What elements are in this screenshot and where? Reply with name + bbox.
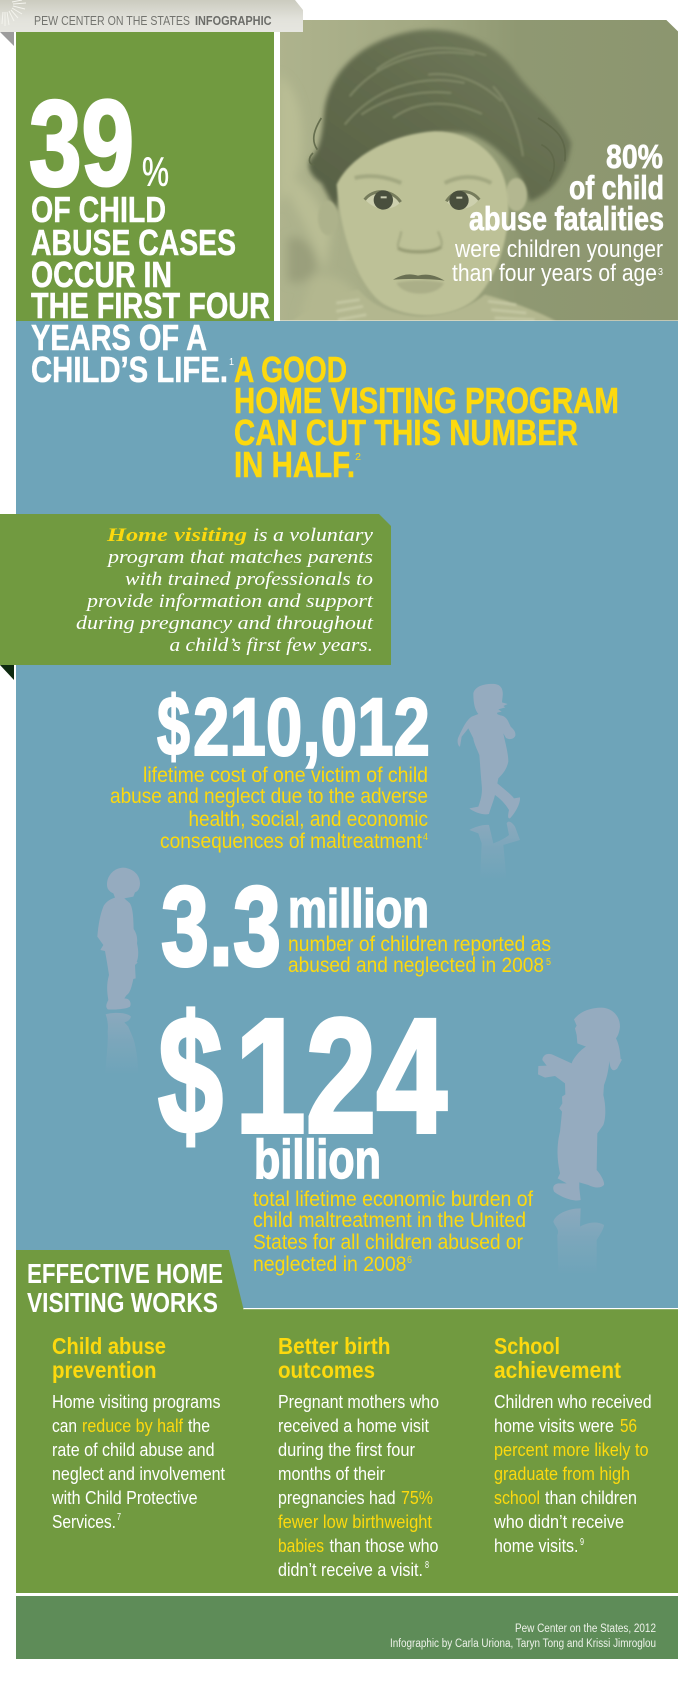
column: school achievement (493, 1333, 652, 1556)
column: better birth outcomes (278, 1333, 439, 1580)
column: child abuse prevention: reduce by half (82, 1415, 184, 1436)
column: school achievement: who didn’t receive (493, 1511, 624, 1532)
credit text (390, 1623, 656, 1650)
stat: 3.3 million children: 3.3 (161, 863, 281, 989)
panel: effective home visiting works (16, 1250, 678, 1593)
column: better birth outcomes: months of their (278, 1463, 385, 1484)
column: school achievement: Children who received (494, 1391, 652, 1412)
column: better birth outcomes: fewer low birthweight (278, 1511, 432, 1532)
headline: good home visiting program: A GOOD (234, 349, 347, 390)
column: better birth outcomes: 8 (425, 1560, 429, 1571)
stat description: neglected in 2008 (253, 1253, 406, 1276)
column: child abuse prevention: Child abuse (52, 1333, 166, 1359)
headline: good home visiting program: IN HALF. (234, 444, 355, 485)
column: school achievement: percent more likely to (494, 1439, 649, 1460)
callout on photo: 80 percent: 3 (658, 267, 663, 278)
column: better birth outcomes: pregnancies had (278, 1487, 396, 1508)
definition text: during pregnancy and throughout (76, 613, 374, 634)
column: child abuse prevention: 7 (117, 1512, 121, 1523)
stat description: 1 (229, 357, 234, 368)
ears (318, 178, 527, 235)
headline: good home visiting program: 2 (355, 452, 361, 463)
stat description: number of children reported as (288, 933, 551, 956)
stat: 124 billion dollars: 124 (235, 984, 447, 1167)
column: better birth outcomes: received a home visit (278, 1415, 429, 1436)
stat description (253, 1188, 533, 1276)
stat description: consequences of maltreatment (160, 830, 422, 853)
section heading (27, 1258, 223, 1318)
stat description: CHILD’S LIFE. (31, 349, 228, 390)
stat description (110, 764, 428, 853)
definition text: with trained professionals to (125, 569, 373, 590)
stat description: lifetime cost of one victim of child (143, 764, 428, 787)
column: child abuse prevention: neglect and involvement (52, 1463, 225, 1484)
shirt (329, 294, 555, 320)
panel: blue background (16, 321, 678, 1309)
column: school achievement: home visits. (494, 1535, 578, 1556)
column: school achievement: 9 (580, 1537, 584, 1548)
column: better birth outcomes: didn’t receive a visit. (278, 1559, 423, 1580)
section heading: VISITING WORKS (27, 1287, 218, 1318)
column: school achievement: achievement (494, 1357, 621, 1383)
stat description: 4 (423, 832, 428, 843)
stat: 210,012 dollars lifetime cost: 210,012 (193, 682, 430, 773)
header label: INFOGRAPHIC (195, 13, 272, 28)
stat description: YEARS OF A (31, 317, 207, 358)
stat description: abused and neglected in 2008 (288, 954, 544, 977)
panel: footer credits (16, 1596, 678, 1659)
stat description (288, 933, 551, 977)
sunburst logo (2, 0, 26, 26)
icon: girl silhouette (538, 1008, 622, 1275)
column: child abuse prevention: can (52, 1415, 77, 1436)
definition text (76, 525, 374, 656)
stat description: 6 (407, 1255, 412, 1266)
column: child abuse prevention: prevention (52, 1357, 156, 1383)
facial features (355, 176, 491, 294)
stat description: OCCUR IN (31, 254, 172, 295)
icon: definition ribbon fold (0, 665, 14, 680)
column: child abuse prevention: Services. (52, 1511, 116, 1532)
stat description: abuse and neglect due to the adverse (110, 785, 428, 808)
column: child abuse prevention (51, 1333, 225, 1532)
icon: top ribbon fold (0, 32, 14, 46)
stat description: ABUSE CASES (31, 222, 236, 263)
stat: 210,012 dollars lifetime cost: $ (157, 679, 190, 773)
stat: 124 billion dollars (158, 981, 533, 1276)
panel: home visiting definition (0, 514, 391, 665)
face (337, 131, 509, 315)
stat description: 5 (546, 957, 551, 968)
callout on photo: 80 percent: 80% (606, 138, 663, 175)
column: better birth outcomes: than those who (330, 1535, 438, 1556)
stat description: THE FIRST FOUR (31, 285, 270, 326)
definition text: provide information and support (85, 591, 374, 612)
headline: good home visiting program: CAN CUT THIS NUMBER (234, 412, 578, 453)
panel: green statistic block (16, 32, 274, 321)
stat: 39 percent of child abuse cases (29, 75, 270, 390)
stat: 210,012 dollars lifetime cost (110, 679, 430, 853)
stat description: child maltreatment in the United (253, 1209, 526, 1232)
column: school achievement: than children (545, 1487, 637, 1508)
credit text: Pew Center on the States, 2012 (515, 1623, 656, 1635)
stat: 3.3 million children (161, 863, 551, 989)
definition text: Home visiting (106, 525, 247, 546)
icon: walking toddler silhouette (458, 684, 520, 880)
column: school achievement: school (494, 1487, 540, 1508)
column: school achievement: School (494, 1333, 560, 1359)
stat: 124 billion dollars: billion (254, 1128, 381, 1190)
stat: 39 percent of child abuse cases: % (142, 149, 169, 195)
page header band (0, 0, 303, 32)
column: better birth outcomes: babies (278, 1535, 324, 1556)
definition text: is a voluntary (253, 525, 374, 546)
definition text: program that matches parents (106, 547, 373, 568)
header label: PEW CENTER ON THE STATES (34, 13, 190, 28)
stat description (31, 189, 270, 390)
stat description: States for all children abused or (253, 1231, 523, 1254)
column: school achievement: home visits were (494, 1415, 614, 1436)
column: child abuse prevention: the (188, 1415, 210, 1436)
column: better birth outcomes: during the first four (278, 1439, 415, 1460)
stat: 39 percent of child abuse cases: 39 (29, 75, 134, 211)
column: school achievement: 56 (620, 1415, 637, 1436)
stat description: health, social, and economic (188, 808, 428, 831)
stat description: total lifetime economic burden of (253, 1188, 533, 1211)
headline: good home visiting program (234, 349, 619, 485)
column: better birth outcomes: 75% (401, 1487, 433, 1508)
section heading: EFFECTIVE HOME (27, 1258, 223, 1289)
stat: 3.3 million children: million (288, 879, 429, 939)
column: school achievement: graduate from high (494, 1463, 630, 1484)
stat: 124 billion dollars: $ (158, 981, 223, 1169)
column: better birth outcomes: Better birth (278, 1333, 390, 1359)
stat description: OF CHILD (31, 189, 166, 230)
photo: child's face (278, 18, 678, 321)
column: child abuse prevention: Home visiting programs (52, 1391, 220, 1412)
icon: standing child silhouette (97, 868, 140, 1075)
definition text: a child’s first few years. (170, 635, 373, 656)
column: better birth outcomes: Pregnant mothers who (278, 1391, 439, 1412)
column: better birth outcomes: outcomes (278, 1357, 375, 1383)
callout on photo: 80 percent (452, 138, 664, 287)
hair (309, 30, 571, 211)
column: child abuse prevention: with Child Protective (51, 1487, 198, 1508)
column: child abuse prevention: rate of child abuse and (52, 1439, 214, 1460)
